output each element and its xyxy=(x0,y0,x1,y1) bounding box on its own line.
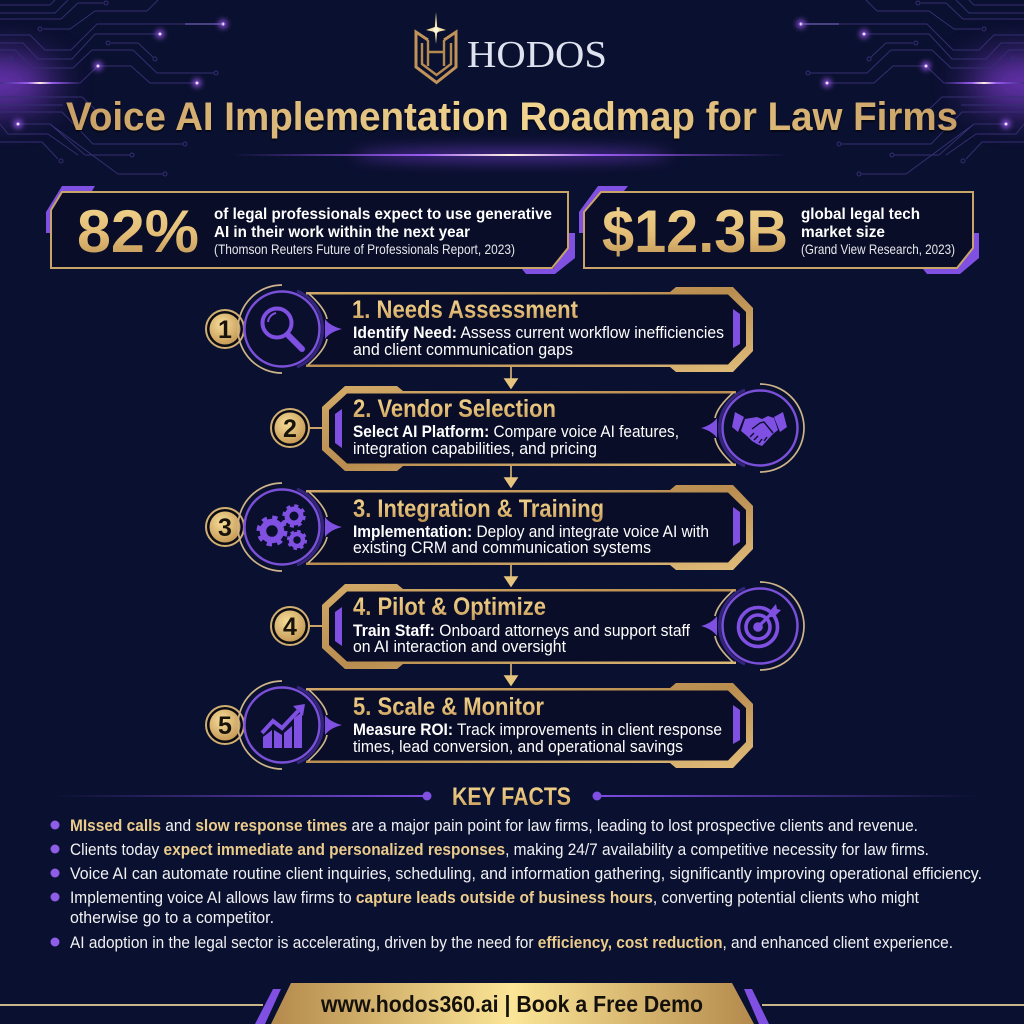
number badge xyxy=(271,607,309,645)
icon: target xyxy=(738,604,781,646)
icon: magnifying glass xyxy=(262,308,302,349)
panel: stat 82% xyxy=(46,186,575,274)
stat description: (Thomson Reuters Future of Professionals Report, 2023) xyxy=(214,241,515,257)
stat description xyxy=(214,206,552,257)
number badge: 1 xyxy=(218,316,232,344)
panel: step 1 needs assessment xyxy=(206,285,753,373)
background glow: right xyxy=(969,59,1024,107)
big number: 82% xyxy=(77,198,199,265)
panel: step 4 pilot and optimize xyxy=(271,582,804,670)
arrow: step 4 to 5 xyxy=(505,663,517,685)
number badge xyxy=(206,508,244,546)
panel: step 5 scale and monitor xyxy=(206,681,753,769)
icon circle xyxy=(701,582,804,670)
panel: stat $12.3B xyxy=(579,186,979,274)
bullet dots xyxy=(50,820,60,946)
number badge: 2 xyxy=(283,415,297,443)
stat description: market size xyxy=(801,224,885,241)
stat description: of legal professionals expect to use generative xyxy=(214,206,552,223)
fact 2: Clients today expect immediate and personalized responses, making 24/7 availability a competitive necessity for law firms. xyxy=(70,840,929,859)
step text: and client communication gaps xyxy=(353,341,573,359)
step text: Train Staff: Onboard attorneys and support staff xyxy=(353,622,690,640)
key facts heading xyxy=(50,783,980,811)
icon circle xyxy=(701,384,804,472)
step text xyxy=(353,395,679,458)
step text: on AI interaction and oversight xyxy=(353,638,566,656)
icon circle xyxy=(238,285,342,373)
title: Voice AI Implementation Roadmap for Law Firms xyxy=(66,95,958,139)
fact 4: Implementing voice AI allows law firms to capture leads outside of business hours, converting potential clients who might xyxy=(70,888,919,907)
circuit pattern: left xyxy=(0,0,223,176)
step text: Identify Need: Assess current workflow inefficiencies xyxy=(353,324,724,342)
arrow: step 1 to 2 xyxy=(505,366,517,388)
step text: Measure ROI: Track improvements in client response xyxy=(353,721,722,739)
stat description xyxy=(801,206,955,257)
logo xyxy=(416,12,607,82)
step text: 3. Integration & Training xyxy=(353,495,604,523)
icon: shield with H and star xyxy=(416,12,456,82)
icon circle xyxy=(238,483,342,571)
footer call to action xyxy=(0,983,1024,1024)
big number: $12.3B xyxy=(602,198,788,265)
circuit pattern: right xyxy=(801,0,1024,176)
fact 3: Voice AI can automate routine client inquiries, scheduling, and information gathering, significantly improving operational efficiency. xyxy=(70,864,982,883)
number badge: 3 xyxy=(218,514,232,542)
step text: Select AI Platform: Compare voice AI features, xyxy=(353,423,679,441)
step text xyxy=(352,296,724,359)
step text xyxy=(353,693,722,756)
panel: step 3 integration and training xyxy=(206,483,753,571)
step text xyxy=(353,495,709,557)
stat description: (Grand View Research, 2023) xyxy=(801,241,955,257)
fact 5: AI adoption in the legal sector is accelerating, driven by the need for efficiency, cost reduction, and enhanced client experience. xyxy=(70,933,953,952)
key facts heading: KEY FACTS xyxy=(452,783,571,811)
number badge xyxy=(271,409,309,447)
number badge: 5 xyxy=(218,712,232,740)
step text: Implementation: Deploy and integrate voice AI with xyxy=(353,523,709,541)
arrow: step 2 to 3 xyxy=(505,465,517,487)
number badge xyxy=(206,706,244,744)
icon: gears xyxy=(258,506,306,549)
stat description: AI in their work within the next year xyxy=(214,224,470,241)
arrow: step 3 to 4 xyxy=(505,564,517,586)
panel: step 2 vendor selection xyxy=(271,384,804,472)
step text: 2. Vendor Selection xyxy=(353,395,556,423)
icon circle xyxy=(238,681,342,769)
background glow: left xyxy=(0,59,55,107)
step text: 5. Scale & Monitor xyxy=(353,693,544,721)
step text: existing CRM and communication systems xyxy=(353,539,651,557)
number badge xyxy=(206,310,244,348)
step text: 1. Needs Assessment xyxy=(352,296,579,324)
fact 4 xyxy=(70,888,919,927)
footer call to action: www.hodos360.ai | Book a Free Demo xyxy=(320,991,703,1017)
step text: 4. Pilot & Optimize xyxy=(353,593,546,621)
icon: growth chart xyxy=(262,704,305,748)
wordmark: HODOS xyxy=(467,34,607,76)
step text xyxy=(353,593,690,656)
step text: integration capabilities, and pricing xyxy=(353,440,597,458)
fact 1: MIssed calls and slow response times are a major pain point for law firms, leading to lost prospective clients and revenue. xyxy=(70,816,918,835)
title glow line xyxy=(230,148,790,162)
icon: handshake xyxy=(732,412,787,446)
fact 4: otherwise go to a competitor. xyxy=(70,908,274,927)
number badge: 4 xyxy=(283,613,297,641)
panel: key facts xyxy=(50,783,982,952)
glowing circuit nodes xyxy=(0,20,1024,128)
stat description: global legal tech xyxy=(801,206,920,223)
step text: times, lead conversion, and operational savings xyxy=(353,738,683,756)
